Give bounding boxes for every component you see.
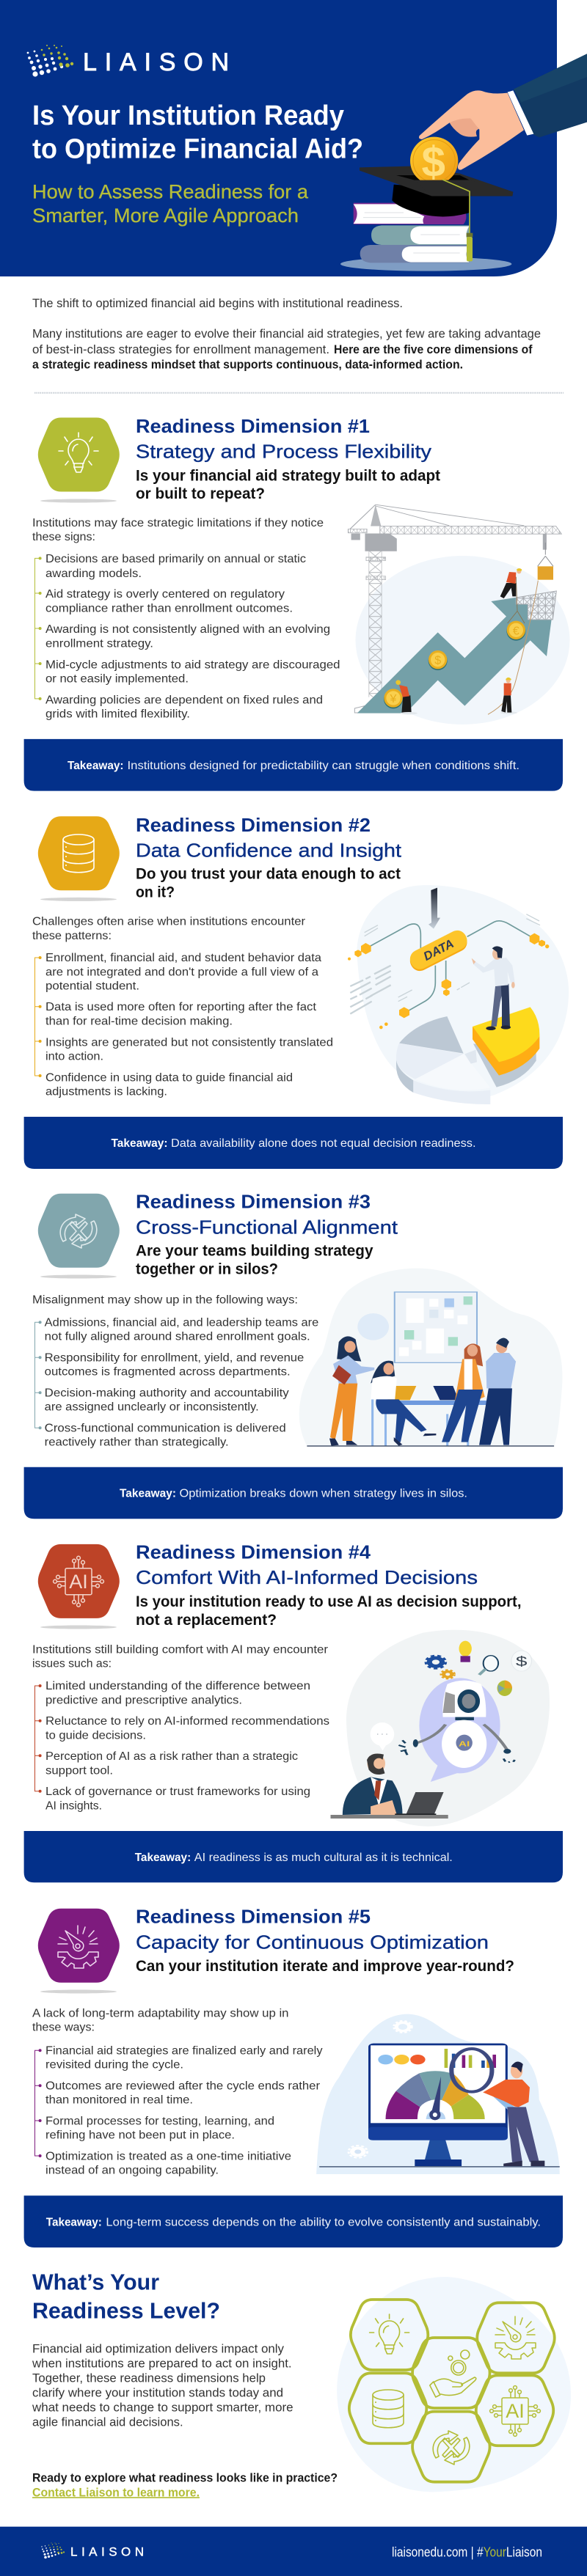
icon: sync hexagon [38, 1194, 120, 1279]
list: warning signs [35, 553, 340, 721]
takeaway 2: Data availability alone does not equal decision readiness. [171, 1137, 475, 1150]
takeaway 1: Takeaway: [68, 760, 123, 772]
list: warning signs: Mid-cycle adjustments to aid strategy are discouraged [45, 658, 340, 671]
list: warning signs: compliance rather than enrollment outcomes. [45, 603, 293, 615]
list: AI comfort issues: Reluctance to rely on AI-informed recommendations [45, 1715, 329, 1728]
illustration: crane and growth arrow with workers: $ [434, 655, 441, 667]
panel: readiness dimension 4 [24, 1541, 563, 1882]
list: warning signs: Decisions are based primarily on annual or static [45, 553, 306, 565]
heading: dimension 5: Capacity for Continuous Optimization [136, 1931, 489, 1953]
illustration: six hexagon icon cluster: AI [506, 2400, 525, 2422]
panel: what's your readiness level [32, 2269, 571, 2499]
panel: readiness dimension 3 [24, 1190, 563, 1519]
heading: dimension 3: Readiness Dimension #3 [136, 1190, 371, 1212]
list: adaptability signs: Outcomes are reviewed after the cycle ends rather [45, 2080, 321, 2092]
list: data challenges: are not integrated and don't provide a full view of a [45, 966, 318, 978]
list: adaptability signs: Optimization is treated as a one-time initiative [45, 2150, 291, 2162]
text: lead-in [32, 1643, 329, 1670]
list: warning signs: enrollment strategy. [45, 638, 153, 650]
list: adaptability signs: Financial aid strategies are finalized early and rarely [45, 2044, 323, 2057]
call to action: Contact Liaison to learn more. [32, 2486, 200, 2499]
header banner [0, 0, 587, 276]
text: closing paragraph: Together, these readiness dimensions help [32, 2371, 266, 2385]
list: AI comfort issues: Perception of AI as a risk rather than a strategic [45, 1750, 298, 1763]
list: misalignment signs: reactively rather than strategically. [45, 1436, 229, 1449]
subtitle: Smarter, More Agile Approach [32, 205, 299, 227]
text: closing paragraph: what needs to change to support smarter, more [32, 2400, 294, 2414]
heading: dimension 1: Strategy and Process Flexibility [136, 441, 431, 463]
title: Is Your Institution Ready [32, 100, 344, 131]
footer [0, 2527, 587, 2576]
list: AI comfort issues: predictive and prescriptive analytics. [45, 1694, 242, 1706]
text: lead-in: Challenges often arise when institutions encounter [32, 915, 306, 928]
list: misalignment signs: Responsibility for enrollment, yield, and revenue [45, 1351, 304, 1364]
text: lead-in: A lack of long-term adaptability may show up in [32, 2007, 289, 2019]
list: adaptability signs [35, 2044, 323, 2177]
text: lead-in: these patterns: [32, 930, 112, 942]
list: AI comfort issues: support tool. [45, 1764, 113, 1777]
heading: dimension 4: Readiness Dimension #4 [136, 1541, 371, 1563]
text: lead-in: Misalignment may show up in the following ways: [32, 1294, 298, 1307]
list: adaptability signs: refining have not been put in place. [45, 2129, 235, 2142]
panel: readiness dimension 1 [24, 415, 570, 791]
text: closing paragraph: clarify where your institution stands today and [32, 2385, 283, 2399]
list: misalignment signs: not fully aligned around shared enrollment goals. [45, 1331, 310, 1343]
list: warning signs: awarding models. [45, 568, 142, 580]
list: data challenges [35, 952, 333, 1098]
list: data challenges: than for real-time decision making. [45, 1015, 233, 1028]
text: closing paragraph: Financial aid optimization delivers impact only [32, 2341, 285, 2355]
takeaway 3: Takeaway: [120, 1488, 176, 1500]
list: misalignment signs: outcomes is fragmented across departments. [45, 1366, 291, 1379]
takeaway 1: Institutions designed for predictability can struggle when conditions shift. [128, 760, 519, 772]
heading: dimension 3: together or in silos? [136, 1261, 278, 1277]
list: adaptability signs: than monitored in real time. [45, 2094, 193, 2107]
text: lead-in: issues such as: [32, 1658, 112, 1670]
text: lead-in [32, 517, 324, 543]
heading: dimension 4 [136, 1541, 521, 1629]
illustration: six hexagon icon cluster [337, 2277, 571, 2492]
heading: dimension 2: on it? [136, 884, 175, 901]
text: lead-in: Institutions may face strategic limitations if they notice [32, 517, 324, 529]
panel: readiness dimension 5 [24, 1906, 563, 2247]
text: closing paragraph: when institutions are prepared to act on insight. [32, 2356, 292, 2370]
call to action [32, 2471, 338, 2499]
illustration: man consulting AI robot: $ [516, 1655, 528, 1670]
takeaway 2: Takeaway: [112, 1137, 167, 1150]
heading: dimension 2 [136, 814, 402, 901]
heading: dimension 3: Cross-Functional Alignment [136, 1216, 398, 1238]
heading: dimension 4: not a replacement? [136, 1612, 277, 1629]
list: AI comfort issues: Lack of governance or trust frameworks for using [45, 1786, 310, 1798]
intro text: Here are the five core dimensions of [334, 343, 533, 356]
intro text: of best-in-class strategies for enrollment management. [32, 343, 329, 356]
list: warning signs: Awarding is not consistently aligned with an evolving [45, 623, 330, 636]
list: AI comfort issues: Limited understanding of the difference between [45, 1680, 310, 1692]
heading: dimension 1: Readiness Dimension #1 [136, 415, 370, 437]
list: data challenges: Data is used more often for reporting after the fact [45, 1001, 317, 1013]
icon: AI chip hexagon [38, 1544, 120, 1629]
takeaway 1 [24, 739, 563, 791]
illustration: hand dropping coin into graduation cap on books [340, 54, 587, 271]
illustration: hand dropping coin into graduation cap on books: $ [421, 139, 445, 186]
text: lead-in: Institutions still building comfort with AI may encounter [32, 1643, 329, 1656]
list: AI comfort issues [35, 1680, 329, 1812]
list: data challenges: Enrollment, financial aid, and student behavior data [45, 952, 321, 964]
heading: dimension 5: Can your institution iterate and improve year-round? [136, 1958, 514, 1975]
list: AI comfort issues: to guide decisions. [45, 1729, 146, 1742]
list: misalignment signs: Admissions, financial aid, and leadership teams are [45, 1316, 318, 1329]
heading: dimension 2: Readiness Dimension #2 [136, 814, 371, 836]
takeaway 5: Takeaway: [46, 2216, 102, 2228]
text: closing paragraph [32, 2341, 294, 2429]
footer logo: LIAISON [70, 2545, 144, 2559]
list: misalignment signs: Cross-functional communication is delivered [45, 1422, 286, 1434]
list: data challenges: adjustments is lacking. [45, 1086, 167, 1098]
takeaway 4 [24, 1831, 563, 1882]
heading: dimension 1: or built to repeat? [136, 485, 265, 502]
panel: readiness dimension 2 [24, 814, 569, 1169]
icon: light bulb hexagon [38, 418, 120, 503]
illustration: person on pie chart with data pipeline [348, 885, 569, 1104]
text: lead-in [32, 2007, 289, 2034]
heading: dimension 4: Is your institution ready to use AI as decision support, [136, 1593, 521, 1610]
list: data challenges: into action. [45, 1051, 103, 1063]
illustration: team meeting in front of board [299, 1269, 562, 1447]
takeaway 2 [24, 1117, 563, 1169]
heading: dimension 3 [136, 1190, 398, 1277]
text: lead-in: these ways: [32, 2022, 95, 2034]
heading: dimension 2: Data Confidence and Insight [136, 839, 402, 861]
text: lead-in: these signs: [32, 531, 95, 543]
takeaway 3 [24, 1467, 563, 1519]
illustration: crane and growth arrow with workers: € [513, 625, 519, 637]
icon: hand with coins [430, 2350, 476, 2397]
list: adaptability signs: revisited during the cycle. [45, 2059, 183, 2072]
logo: Liaison: LIAISON [83, 48, 229, 76]
takeaway 4: Takeaway: [135, 1852, 191, 1864]
text: closing paragraph: agile financial aid decisions. [32, 2415, 183, 2429]
icon: AI chip hexagon: AI [69, 1571, 88, 1593]
text: lead-in [32, 915, 306, 942]
takeaway 5 [24, 2195, 563, 2247]
icon: gauge and gear hexagon [38, 1909, 120, 1993]
subtitle: How to Assess Readiness for a [32, 181, 308, 203]
illustration: person on pie chart with data pipeline: DATA [421, 936, 456, 964]
heading: dimension 5: Readiness Dimension #5 [136, 1906, 371, 1928]
list: warning signs: Awarding policies are dependent on fixed rules and [45, 694, 323, 706]
call to action: Ready to explore what readiness looks like in practice? [32, 2471, 338, 2484]
heading: closing: What’s Your [32, 2269, 159, 2294]
intro text: a strategic readiness mindset that supports continuous, data-informed action. [32, 358, 463, 371]
footer logo [41, 2543, 144, 2559]
list: data challenges: Confidence in using data to guide financial aid [45, 1071, 293, 1084]
illustration: crane and growth arrow with workers: ¥ [390, 693, 397, 705]
illustration: man consulting AI robot: AI [459, 1739, 470, 1748]
illustration: crane and growth arrow with workers [348, 504, 569, 724]
intro text: Many institutions are eager to evolve their financial aid strategies, yet few are taking advantage [32, 328, 541, 341]
heading: dimension 2: Do you trust your data enough to act [136, 865, 401, 883]
heading: dimension 1 [136, 415, 440, 502]
illustration: man consulting AI robot [331, 1630, 550, 1827]
list: warning signs: or not easily implemented. [45, 673, 189, 686]
footer website and hashtag: liaisonedu.com | #YourLiaison [392, 2545, 542, 2560]
list: adaptability signs: Formal processes for testing, learning, and [45, 2115, 274, 2127]
takeaway 4: AI readiness is as much cultural as it is technical. [194, 1852, 453, 1864]
title [32, 100, 363, 165]
list: misalignment signs [35, 1316, 318, 1449]
list: warning signs: grids with limited flexibility. [45, 708, 190, 721]
takeaway 3: Optimization breaks down when strategy lives in silos. [179, 1488, 467, 1500]
intro text: The shift to optimized financial aid begins with institutional readiness. [32, 297, 403, 310]
list: misalignment signs: are assigned unclearly or inconsistently. [45, 1401, 259, 1414]
heading: dimension 5 [136, 1906, 514, 1975]
illustration: monitor gauge and man with magnifier [316, 2014, 560, 2174]
subtitle [32, 181, 308, 227]
list: AI comfort issues: AI insights. [45, 1799, 102, 1812]
list: warning signs: Aid strategy is overly centered on regulatory [45, 588, 285, 601]
title: to Optimize Financial Aid? [32, 134, 363, 165]
list: data challenges: potential student. [45, 980, 139, 993]
icon: database hexagon [38, 816, 120, 901]
list: data challenges: Insights are generated but not consistently translated [45, 1036, 333, 1049]
logo: Liaison [27, 45, 229, 77]
heading: dimension 1: Is your financial aid strategy built to adapt [136, 468, 440, 485]
heading: closing [32, 2269, 220, 2324]
list: adaptability signs: instead of an ongoing capability. [45, 2165, 219, 2177]
intro text [32, 297, 541, 371]
heading: closing: Readiness Level? [32, 2298, 220, 2324]
heading: dimension 4: Comfort With AI-Informed Decisions [136, 1566, 478, 1588]
takeaway 5: Long-term success depends on the ability to evolve consistently and sustainably. [106, 2216, 541, 2228]
list: misalignment signs: Decision-making authority and accountability [45, 1387, 289, 1399]
heading: dimension 3: Are your teams building strategy [136, 1243, 373, 1260]
